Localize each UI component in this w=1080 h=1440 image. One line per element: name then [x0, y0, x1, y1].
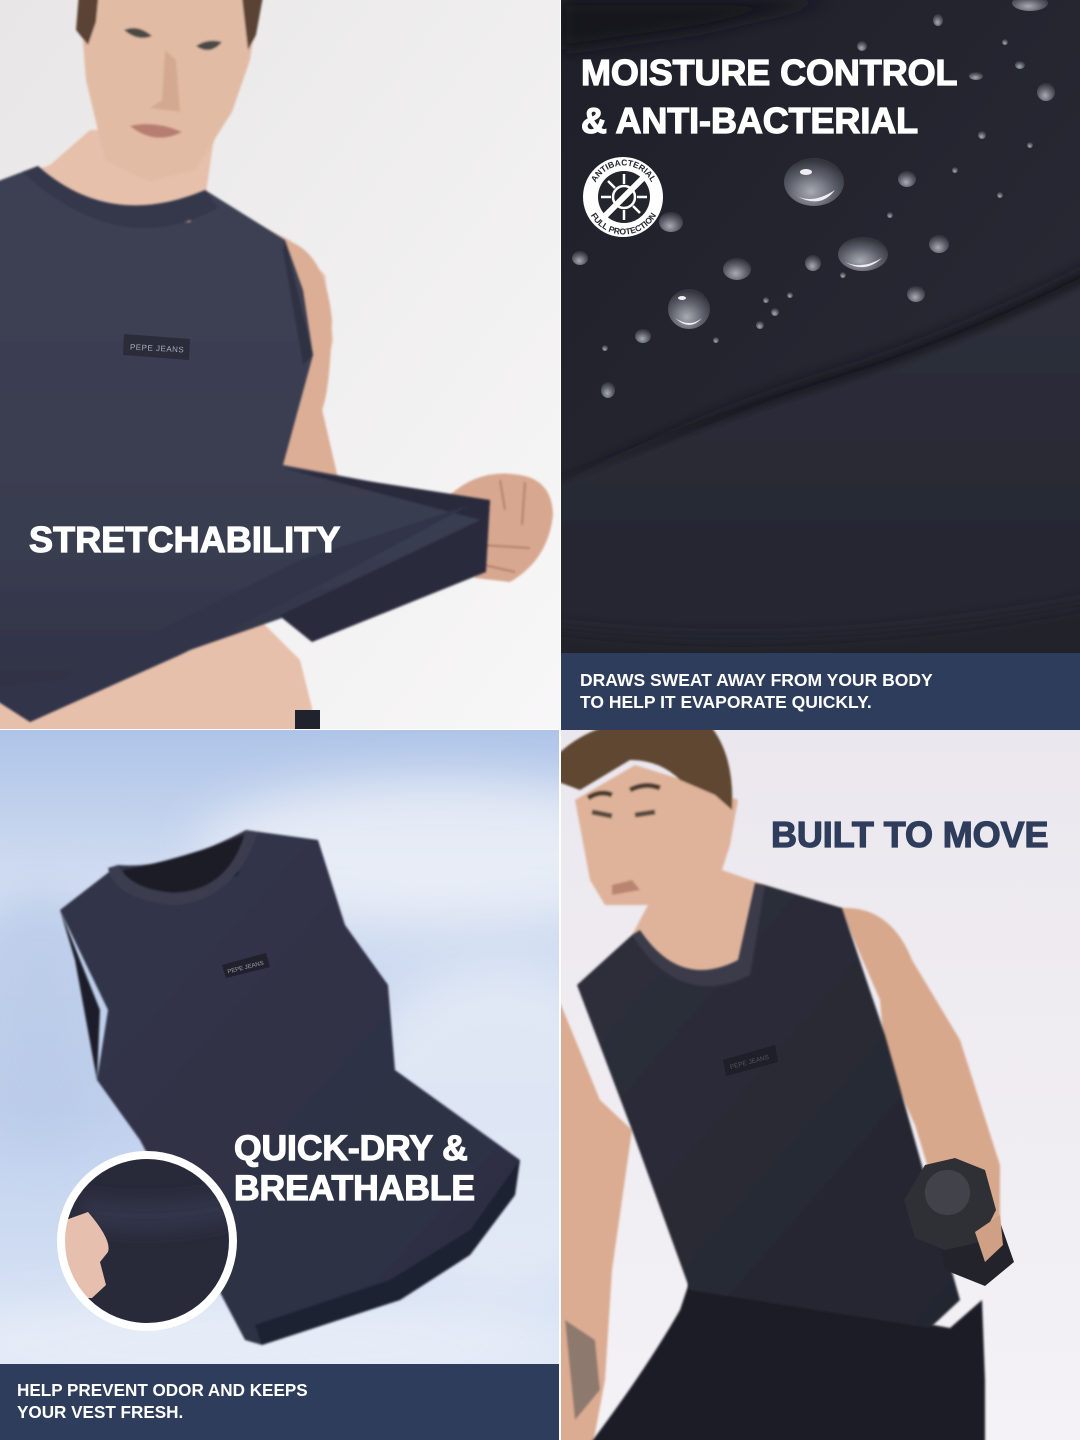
- chest logo patch: PEPE JEANS: [130, 343, 185, 354]
- text: quick-dry description: [17, 1381, 308, 1422]
- water droplets: [572, 0, 1055, 398]
- fabric close-up lens: [60, 1155, 235, 1330]
- icon: dumbbell: [904, 1158, 1014, 1286]
- heading: moisture control: [581, 52, 957, 141]
- man's head: [561, 730, 766, 972]
- heading: moisture control: & ANTI-BACTERIAL: [581, 100, 918, 141]
- caption band: moisture: [561, 653, 1080, 730]
- vest logo patch: [222, 953, 270, 978]
- floating vest: [60, 830, 520, 1345]
- text: moisture description: DRAWS SWEAT AWAY FROM YOUR BODY: [580, 670, 933, 690]
- text: moisture description: [580, 670, 933, 712]
- heading: quick-dry: BREATHABLE: [234, 1168, 475, 1208]
- icon: antibacterial badge: ANTIBACTERIAL: [592, 160, 655, 182]
- panel: moisture fabric photo: [540, 0, 1080, 680]
- man's face: [74, 0, 264, 144]
- panel: built to move photo: [540, 720, 1080, 1440]
- arms: [540, 908, 1000, 1440]
- droplet highlights: [675, 169, 882, 325]
- chest logo patch: [123, 334, 190, 360]
- icon: antibacterial badge: FULL PROTECTION: [591, 212, 656, 234]
- vest: [577, 883, 960, 1328]
- heading: quick-dry: QUICK-DRY &: [234, 1128, 468, 1168]
- shorts: [570, 1280, 985, 1440]
- panel: stretchability photo: [0, 0, 560, 750]
- text: quick-dry description: YOUR VEST FRESH.: [17, 1402, 183, 1422]
- chest logo patch: PEPE JEANS: [729, 1054, 771, 1071]
- heading: built to move: BUILT TO MOVE: [771, 814, 1048, 855]
- heading: quick-dry: [234, 1128, 475, 1208]
- chest logo patch: [723, 1045, 778, 1076]
- vest body: [0, 166, 490, 722]
- text: moisture description: TO HELP IT EVAPORATE QUICKLY.: [580, 692, 872, 712]
- caption band: quick-dry: [0, 1364, 559, 1440]
- man's torso and arm: [0, 130, 553, 750]
- vest logo patch: PEPE JEANS: [227, 961, 264, 975]
- heading: moisture control: MOISTURE CONTROL: [581, 52, 957, 93]
- heading: stretchability: STRETCHABILITY: [29, 519, 340, 560]
- panel: quick-dry sky photo: [0, 730, 559, 1364]
- waistband: [295, 710, 320, 730]
- text: quick-dry description: HELP PREVENT ODOR AND KEEPS: [17, 1381, 308, 1400]
- icon: antibacterial badge: [583, 157, 663, 237]
